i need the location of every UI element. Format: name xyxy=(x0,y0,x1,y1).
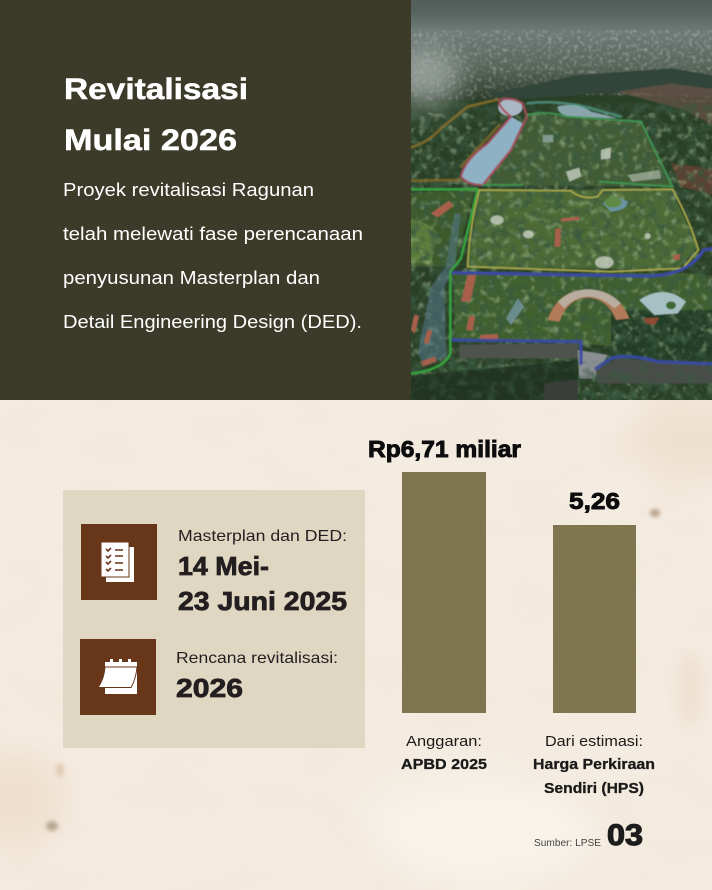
label: anggaran xyxy=(401,733,487,773)
body text: Detail Engineering Design (DED). xyxy=(63,312,362,332)
paper background xyxy=(0,400,712,890)
icon: calendar xyxy=(80,639,156,715)
body text: Proyek revitalisasi Ragunan xyxy=(63,180,314,200)
label: estimasi: Sendiri (HPS) xyxy=(544,780,644,797)
body text xyxy=(63,180,363,332)
aerial masterplan illustration xyxy=(411,0,712,400)
atmospheric haze xyxy=(388,47,461,107)
roofs xyxy=(411,201,680,367)
bar: estimasi xyxy=(553,525,636,713)
bar chart xyxy=(368,436,655,797)
body text: telah melewati fase perencanaan xyxy=(63,224,363,244)
body text: penyusunan Masterplan dan xyxy=(63,268,320,288)
label: estimasi: Dari estimasi: xyxy=(545,733,643,750)
label: anggaran: APBD 2025 xyxy=(401,756,487,773)
label: estimasi xyxy=(533,733,655,797)
text: masterplan schedule: 14 Mei- xyxy=(178,551,269,581)
bar: anggaran xyxy=(402,472,486,713)
light plazas xyxy=(490,135,661,268)
text: revitalisation plan: Rencana revitalisasi: xyxy=(176,650,338,667)
value: estimasi: 5,26 xyxy=(569,488,620,514)
title xyxy=(64,73,248,157)
panel: timeline xyxy=(63,490,365,748)
label: estimasi: Harga Perkiraan xyxy=(533,756,655,773)
page number: 03 xyxy=(607,819,643,852)
label: anggaran: Anggaran: xyxy=(406,733,482,750)
lakes xyxy=(461,117,523,185)
zone: upper park xyxy=(483,113,673,187)
text: masterplan schedule: Masterplan dan DED: xyxy=(178,528,347,545)
text: revitalisation plan: 2026 xyxy=(176,673,243,703)
parking area xyxy=(459,343,578,358)
icon: checklist documents xyxy=(81,524,157,600)
source note: Sumber: LPSE xyxy=(534,838,601,849)
value: anggaran: Rp6,71 miliar xyxy=(368,436,521,462)
boundary lines xyxy=(408,99,712,374)
zone: lower park xyxy=(468,190,698,270)
text: masterplan schedule xyxy=(178,528,347,616)
title: Mulai 2026 xyxy=(64,124,237,157)
arched building xyxy=(548,289,629,322)
text: revitalisation plan xyxy=(176,650,338,703)
panel: title block background xyxy=(0,0,411,400)
title: Revitalisasi xyxy=(64,73,248,106)
text: masterplan schedule: 23 Juni 2025 xyxy=(178,586,347,616)
